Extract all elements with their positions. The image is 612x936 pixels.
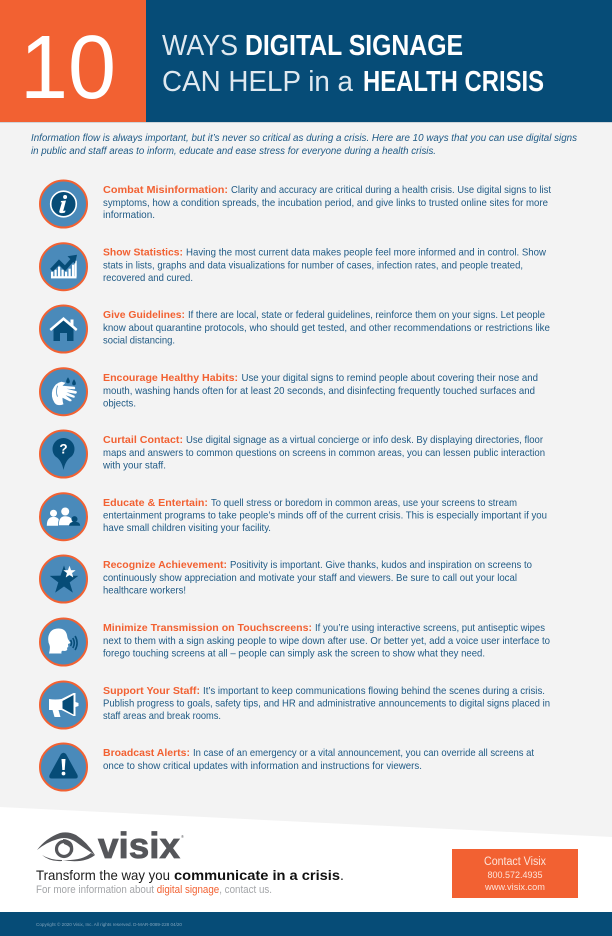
- item 7: recognize achievement: continuously show appreciation and motivate your staff and viewers. Be sure to call out your local: [103, 573, 517, 584]
- item 5: curtail contact: maps and answers to common questions on screens in common areas, you can lessen public interaction: [103, 448, 545, 459]
- item 3: give guidelines: Give Guidelines:: [103, 310, 185, 321]
- orange number panel: 10: [20, 18, 116, 118]
- item 4: encourage healthy habits: objects.: [103, 398, 136, 410]
- item 2: show statistics: Show Statistics:: [103, 248, 183, 259]
- item 8: minimize transmission: If you’re using interactive screens, put antiseptic wipes: [315, 623, 545, 634]
- item 2: show statistics: Having the most current data makes people feel more informed and in control. Show: [186, 248, 547, 259]
- visix logo: ®: [181, 834, 184, 839]
- item 2: show statistics: [40, 243, 547, 290]
- item 3: give guidelines: [40, 306, 550, 352]
- tagline: .: [340, 867, 344, 883]
- icon: megaphone: [40, 682, 87, 728]
- item 9: support your staff: Support Your Staff:: [103, 686, 200, 697]
- footer white panel: [0, 807, 612, 913]
- item 10: broadcast alerts: once to show critical updates with information and instructions for viewers.: [103, 761, 422, 772]
- item 1: combat misinformation: Combat Misinformation:: [103, 185, 228, 196]
- item 8: minimize transmission: Minimize Transmission on Touchscreens:: [103, 623, 312, 634]
- item 6: educate and entertain: Educate & Entertain:: [103, 498, 208, 509]
- item 6: educate and entertain: [40, 493, 547, 540]
- tagline: Transform the way you: [36, 867, 170, 883]
- item 7: recognize achievement: healthcare workers!: [103, 586, 186, 596]
- orange number panel: [0, 0, 146, 122]
- item 7: recognize achievement: Positivity is important. Give thanks, kudos and inspiration on screens to: [230, 560, 532, 571]
- item 1: combat misinformation: symptoms, how a condition spreads, the incubation period, and give links to trusted online sites for more: [103, 198, 548, 209]
- icon: house: [40, 306, 87, 352]
- item 1: combat misinformation: [40, 180, 551, 228]
- title: [162, 30, 544, 98]
- item 1: combat misinformation: information.: [103, 210, 155, 221]
- bottom bar: Copyright © 2020 Visix, Inc. All rights reserved. D-MAR-0089-228 04/20: [36, 922, 183, 927]
- icon: map pin question: [40, 430, 87, 478]
- icon: speaking head: [40, 618, 87, 666]
- intro text: Information flow is always important, but it’s never so critical as during a crisis. Here are 10 ways that you can use digital signs: [31, 133, 577, 144]
- item 1: combat misinformation: Clarity and accuracy are critical during a health crisis. Use digital signs to list: [231, 185, 551, 196]
- tagline: [36, 867, 344, 883]
- icon: info: [40, 180, 87, 228]
- visix logo: visix: [98, 825, 180, 866]
- item 6: educate and entertain: entertainment programs to take people’s minds off of the current crisis. This is especially important if you: [103, 510, 547, 522]
- title: HEALTH CRISIS: [363, 66, 544, 98]
- icon: warning triangle: [40, 744, 87, 790]
- item 9: support your staff: [40, 682, 550, 728]
- icon: rising chart: [40, 243, 87, 290]
- item 9: support your staff: It’s important to keep communications flowing behind the scenes during a crisis.: [203, 686, 545, 697]
- bottom bar: [0, 912, 612, 936]
- item 4: encourage healthy habits: [40, 368, 538, 415]
- icon: washing hands: [40, 368, 87, 415]
- item 2: show statistics: stats in lists, graphs and data visualizations for number of cases, infection rates, and people treated,: [103, 260, 523, 272]
- title: WAYS: [162, 30, 238, 62]
- item 7: recognize achievement: Recognize Achievement:: [103, 560, 227, 571]
- contact button: [452, 849, 578, 898]
- header banner: [0, 0, 612, 123]
- item 4: encourage healthy habits: Use your digital signs to remind people about covering their nose and: [242, 373, 538, 384]
- item 8: minimize transmission: next to them with a sign asking people to wipe down after use. Or better yet, add a voice user interface to: [103, 636, 550, 647]
- item 5: curtail contact: with your staff.: [102, 460, 166, 472]
- item 9: support your staff: Publish progress to goals, safety tips, and HR and administrative announcements to digital signs placed in: [103, 698, 550, 710]
- intro text: [31, 133, 577, 157]
- item 5: curtail contact: Curtail Contact:: [103, 435, 183, 446]
- item 6: educate and entertain: have small children visiting your facility.: [103, 523, 271, 534]
- item 3: give guidelines: know about quarantine protocols, who should get tested, and other recommendations or restrictions like: [103, 323, 550, 334]
- item 6: educate and entertain: To quell stress or boredom in common areas, use your screens to stream: [211, 498, 517, 509]
- icon: family: [40, 493, 87, 540]
- item 4: encourage healthy habits: mouth, washing hands often for at least 20 seconds, and disinfecting frequently touched surfaces and: [103, 386, 535, 397]
- title: CAN HELP in a: [162, 66, 354, 98]
- item 3: give guidelines: If there are local, state or federal guidelines, reinforce them on your signs. Let people: [188, 310, 545, 321]
- item 7: recognize achievement: [40, 556, 532, 602]
- item 5: curtail contact: [40, 430, 545, 478]
- contact button: 800.572.4935: [488, 870, 542, 881]
- item 8: minimize transmission: forego touching screens at all – people can simply ask the screen to show what they need.: [103, 648, 485, 660]
- visix logo: [37, 825, 184, 866]
- icon: map pin question: ?: [59, 442, 68, 456]
- intro text: in public and staff areas to inform, educate and ease stress for everyone during a health crisis.: [31, 146, 436, 157]
- item 2: show statistics: recovered and cured.: [103, 273, 193, 284]
- item 3: give guidelines: social distancing.: [103, 336, 175, 346]
- tagline: communicate in a crisis: [174, 867, 340, 883]
- item 4: encourage healthy habits: Encourage Healthy Habits:: [103, 373, 238, 384]
- item 10: broadcast alerts: In case of an emergency or a vital announcement, you can override all screens at: [193, 748, 534, 759]
- item 5: curtail contact: Use digital signage as a virtual concierge or info desk. By displaying directories, floor: [186, 435, 544, 446]
- icon: stars: [40, 556, 87, 602]
- title: DIGITAL SIGNAGE: [245, 30, 463, 62]
- item 10: broadcast alerts: Broadcast Alerts:: [103, 748, 190, 759]
- item 9: support your staff: staff areas and break rooms.: [103, 711, 221, 722]
- item 10: broadcast alerts: [40, 744, 534, 790]
- contact button: Contact Visix: [484, 856, 546, 868]
- more information line: For more information about digital signage, contact us.: [36, 884, 272, 896]
- icon: eye: [37, 832, 95, 861]
- contact button: www.visix.com: [484, 882, 545, 893]
- item 8: minimize transmission: [40, 618, 550, 666]
